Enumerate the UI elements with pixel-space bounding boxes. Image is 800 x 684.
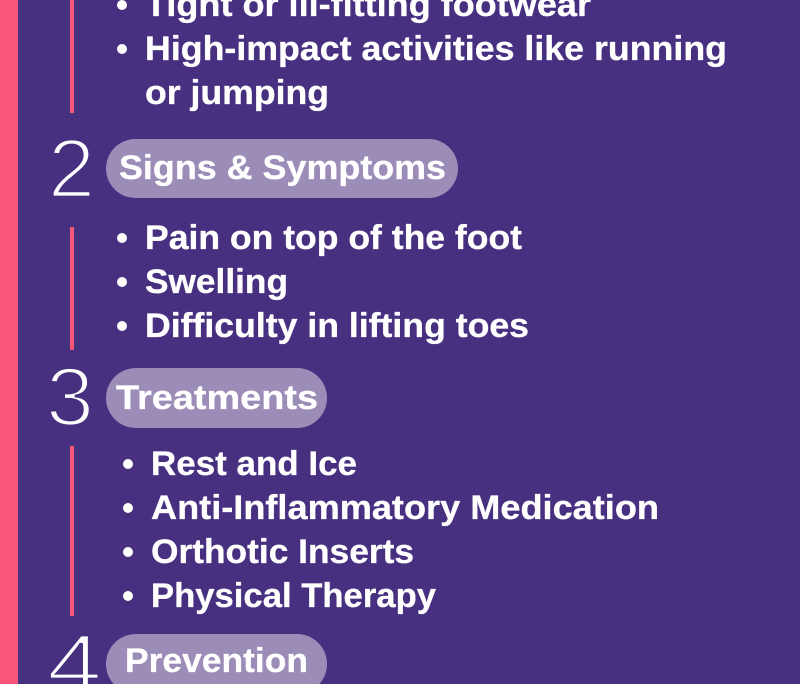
section 2 list: symptoms: Difficulty in lifting toes xyxy=(145,307,529,345)
section 1 list: causes: High-impact activities like running xyxy=(145,30,727,68)
section 2 list: symptoms: Swelling xyxy=(145,263,288,301)
number 2: 2 xyxy=(48,122,95,215)
section 3 heading: Treatments xyxy=(116,379,318,417)
section 3 list: treatments xyxy=(70,445,659,616)
number 3: 3 xyxy=(46,350,94,443)
section 1 list: causes xyxy=(70,0,727,113)
section 1 list: causes: or jumping xyxy=(145,74,329,112)
section 3 heading xyxy=(46,350,327,443)
left accent stripe xyxy=(0,0,18,684)
section 3 list: treatments: Anti-Inflammatory Medication xyxy=(151,489,659,527)
section 4 heading xyxy=(47,617,327,684)
section 2 heading xyxy=(48,122,458,215)
section 2 list: symptoms: Pain on top of the foot xyxy=(145,219,522,257)
section 2 heading: Signs & Symptoms xyxy=(119,149,446,187)
section 4 heading: Prevention xyxy=(125,642,308,680)
pill: Signs & Symptoms xyxy=(106,139,458,198)
section 2 list: symptoms xyxy=(70,219,529,350)
pill: Treatments xyxy=(106,368,327,428)
section 3 list: treatments: Rest and Ice xyxy=(151,445,357,483)
pill: Prevention xyxy=(106,634,327,684)
section 3 list: treatments: Physical Therapy xyxy=(151,577,436,615)
section 3 list: treatments: Orthotic Inserts xyxy=(151,533,414,571)
